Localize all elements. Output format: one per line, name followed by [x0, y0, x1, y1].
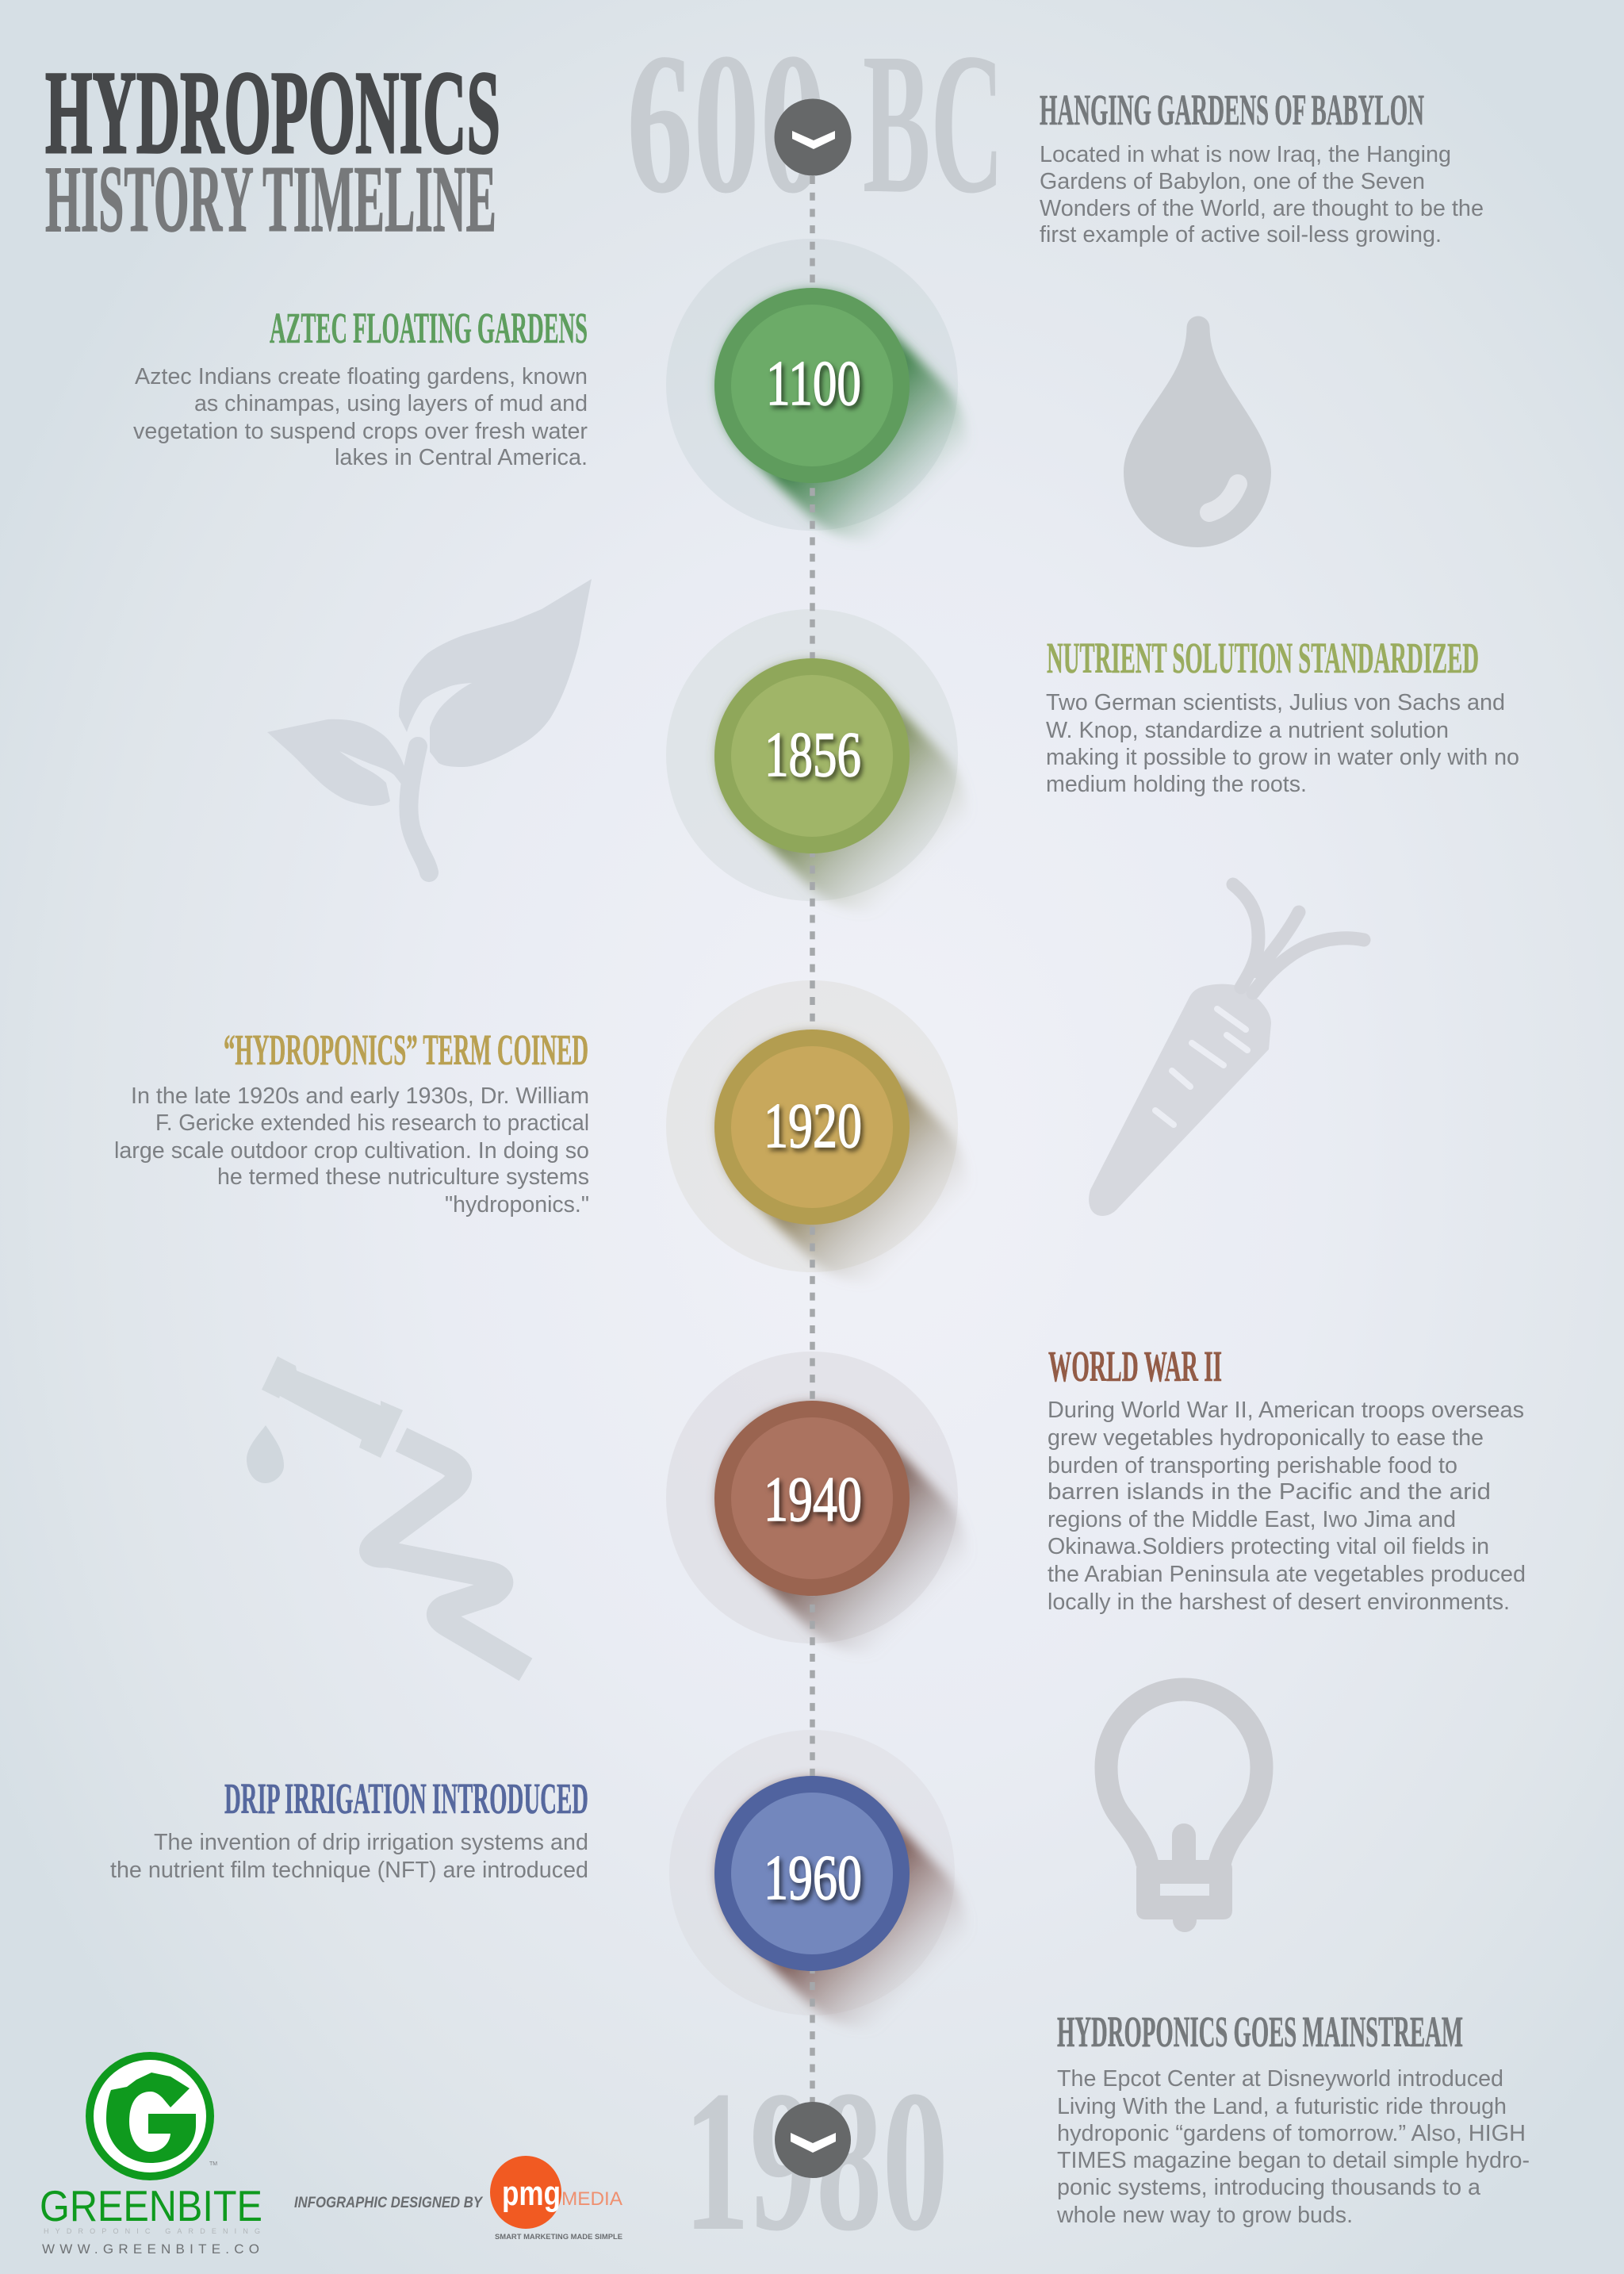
long shadow: 1960 [812, 1873, 874, 1935]
text: HISTORY TIMELINE [45, 146, 496, 251]
node: 1920 [714, 1030, 910, 1225]
node: 1100 [714, 288, 910, 483]
entry: aztec floating gardens [133, 304, 588, 470]
entry: hydroponics term coined: he termed these nutriculture systems [217, 1164, 589, 1190]
icon: water drop [1124, 316, 1271, 547]
entry: nutrient solution standardized: medium holding the roots. [1046, 772, 1307, 797]
entry: aztec floating gardens: Aztec Indians create floating gardens, known [135, 364, 588, 389]
entry: world war ii: During World War II, American troops overseas [1048, 1398, 1524, 1423]
entry: world war ii: locally in the harshest of desert environments. [1048, 1589, 1510, 1615]
entry: hanging gardens of babylon: Gardens of Babylon, one of the Seven [1040, 169, 1425, 194]
entry: hydroponics term coined [114, 1026, 589, 1218]
halo: 1940 [666, 1352, 958, 1643]
logo: pmg media: SMART MARKETING MADE SIMPLE [495, 2233, 622, 2241]
icon: light bulb [1106, 1689, 1262, 1920]
logo mark: TM [209, 2161, 217, 2167]
entry: world war ii: regions of the Middle East, Iwo Jima and [1048, 1507, 1456, 1532]
entry: hydroponics goes mainstream: TIMES magazine began to detail simple hydro- [1057, 2148, 1530, 2173]
entry: nutrient solution standardized: making it possible to grow in water only with no [1046, 745, 1519, 770]
chevron marker: bottom [775, 2102, 851, 2178]
entry: drip irrigation introduced: DRIP IRRIGATION INTRODUCED [224, 1774, 588, 1823]
background year: 1980: 1980 [684, 2050, 948, 2273]
chevron marker: top [774, 98, 852, 176]
wordmark: GREENBITE [40, 2181, 262, 2230]
entry: drip irrigation introduced: The invention of drip irrigation systems and [154, 1830, 588, 1855]
entry: nutrient solution standardized: Two German scientists, Julius von Sachs and [1046, 690, 1505, 715]
long shadow: 1940 [812, 1498, 874, 1560]
halo: 1960 [669, 1730, 955, 2015]
icon: sprout [267, 579, 592, 872]
node: 1100: 1100 [766, 349, 861, 419]
entry: world war ii: Okinawa.Soldiers protecting vital oil fields in [1048, 1534, 1489, 1559]
entry: nutrient solution standardized: W. Knop, standardize a nutrient solution [1046, 718, 1449, 743]
entry: hanging gardens of babylon: Located in what is now Iraq, the Hanging [1040, 142, 1451, 167]
entry: hanging gardens of babylon: first example of active soil-less growing. [1040, 222, 1442, 247]
entry: hydroponics term coined: In the late 1920s and early 1930s, Dr. William [131, 1083, 589, 1109]
entry: hydroponics goes mainstream: hydroponic “gardens of tomorrow.” Also, HIGH [1057, 2121, 1526, 2146]
logo: pmg media: pmg [502, 2174, 561, 2213]
entry: aztec floating gardens: lakes in Central America. [335, 445, 588, 470]
halo: 1856 [666, 609, 958, 901]
entry: hydroponics term coined: "hydroponics." [445, 1192, 589, 1218]
halo: 1100 [666, 239, 958, 531]
entry: aztec floating gardens: as chinampas, using layers of mud and [194, 391, 588, 416]
entry: hanging gardens of babylon [1040, 86, 1484, 247]
long shadow: 1100 [812, 385, 874, 447]
icon: carrot [1089, 884, 1364, 1216]
entry: hydroponics goes mainstream: Living With the Land, a futuristic ride through [1057, 2094, 1507, 2119]
background year: 600 BC: 600 [626, 12, 826, 236]
logo: pmg media [490, 2156, 622, 2241]
entry: world war ii [1048, 1342, 1526, 1615]
logo: greenbite [40, 2052, 262, 2257]
node: 1856 [714, 658, 910, 853]
entry: hydroponics term coined: large scale outdoor crop cultivation. In doing so [114, 1138, 589, 1164]
entry: drip irrigation introduced: the nutrient film technique (NFT) are introduced [110, 1858, 588, 1883]
entry: hydroponics term coined: “HYDROPONICS” TERM COINED [224, 1026, 588, 1074]
entry: hydroponics term coined: F. Gericke extended his research to practical [155, 1110, 589, 1136]
node: 1960 [714, 1776, 910, 1971]
entry: drip irrigation introduced [110, 1774, 588, 1883]
entry: aztec floating gardens: AZTEC FLOATING GARDENS [270, 304, 588, 352]
title [45, 47, 500, 251]
node: 1960: 1960 [764, 1843, 862, 1913]
entry: world war ii: barren islands in the Pacific and the arid [1048, 1479, 1491, 1505]
entry: world war ii: the Arabian Peninsula ate vegetables produced [1048, 1562, 1526, 1587]
entry: world war ii: burden of transporting perishable food to [1048, 1453, 1457, 1478]
node: 1920: 1920 [764, 1091, 862, 1161]
icon: irrigation hose [247, 1356, 526, 1670]
long shadow: 1856 [812, 756, 874, 818]
entry: hydroponics goes mainstream: The Epcot Center at Disneyworld introduced [1057, 2066, 1503, 2092]
tagline: HYDROPONIC GARDENING [44, 2227, 260, 2235]
entry: nutrient solution standardized [1046, 634, 1519, 797]
node: 1940 [714, 1401, 910, 1596]
credit: infographic designed by: INFOGRAPHIC DESIGNED BY [294, 2195, 484, 2211]
title line: hydroponics: HYDROPONICS [45, 47, 500, 178]
logo: pmg media: MEDIA [561, 2188, 622, 2210]
dashed timeline [810, 176, 815, 2103]
entry: aztec floating gardens: vegetation to suspend crops over fresh water [133, 419, 588, 444]
entry: world war ii: grew vegetables hydroponically to ease the [1048, 1425, 1484, 1451]
entry: hanging gardens of babylon: Wonders of the World, are thought to be the [1040, 196, 1484, 221]
entry: world war ii: WORLD WAR II [1048, 1342, 1222, 1390]
halo: 1920 [666, 980, 958, 1272]
logo mark [86, 2052, 217, 2180]
website: WWW.GREENBITE.CO [42, 2241, 259, 2257]
entry: hydroponics goes mainstream [1056, 2007, 1530, 2228]
background year: 600 BC: BC [863, 12, 1004, 236]
node: 1940: 1940 [764, 1465, 862, 1535]
entry: hydroponics goes mainstream: whole new way to grow buds. [1056, 2203, 1353, 2228]
long shadow: 1920 [812, 1127, 874, 1189]
node: 1856: 1856 [764, 720, 861, 790]
entry: hydroponics goes mainstream: ponic systems, introducing thousands to a [1057, 2175, 1481, 2200]
